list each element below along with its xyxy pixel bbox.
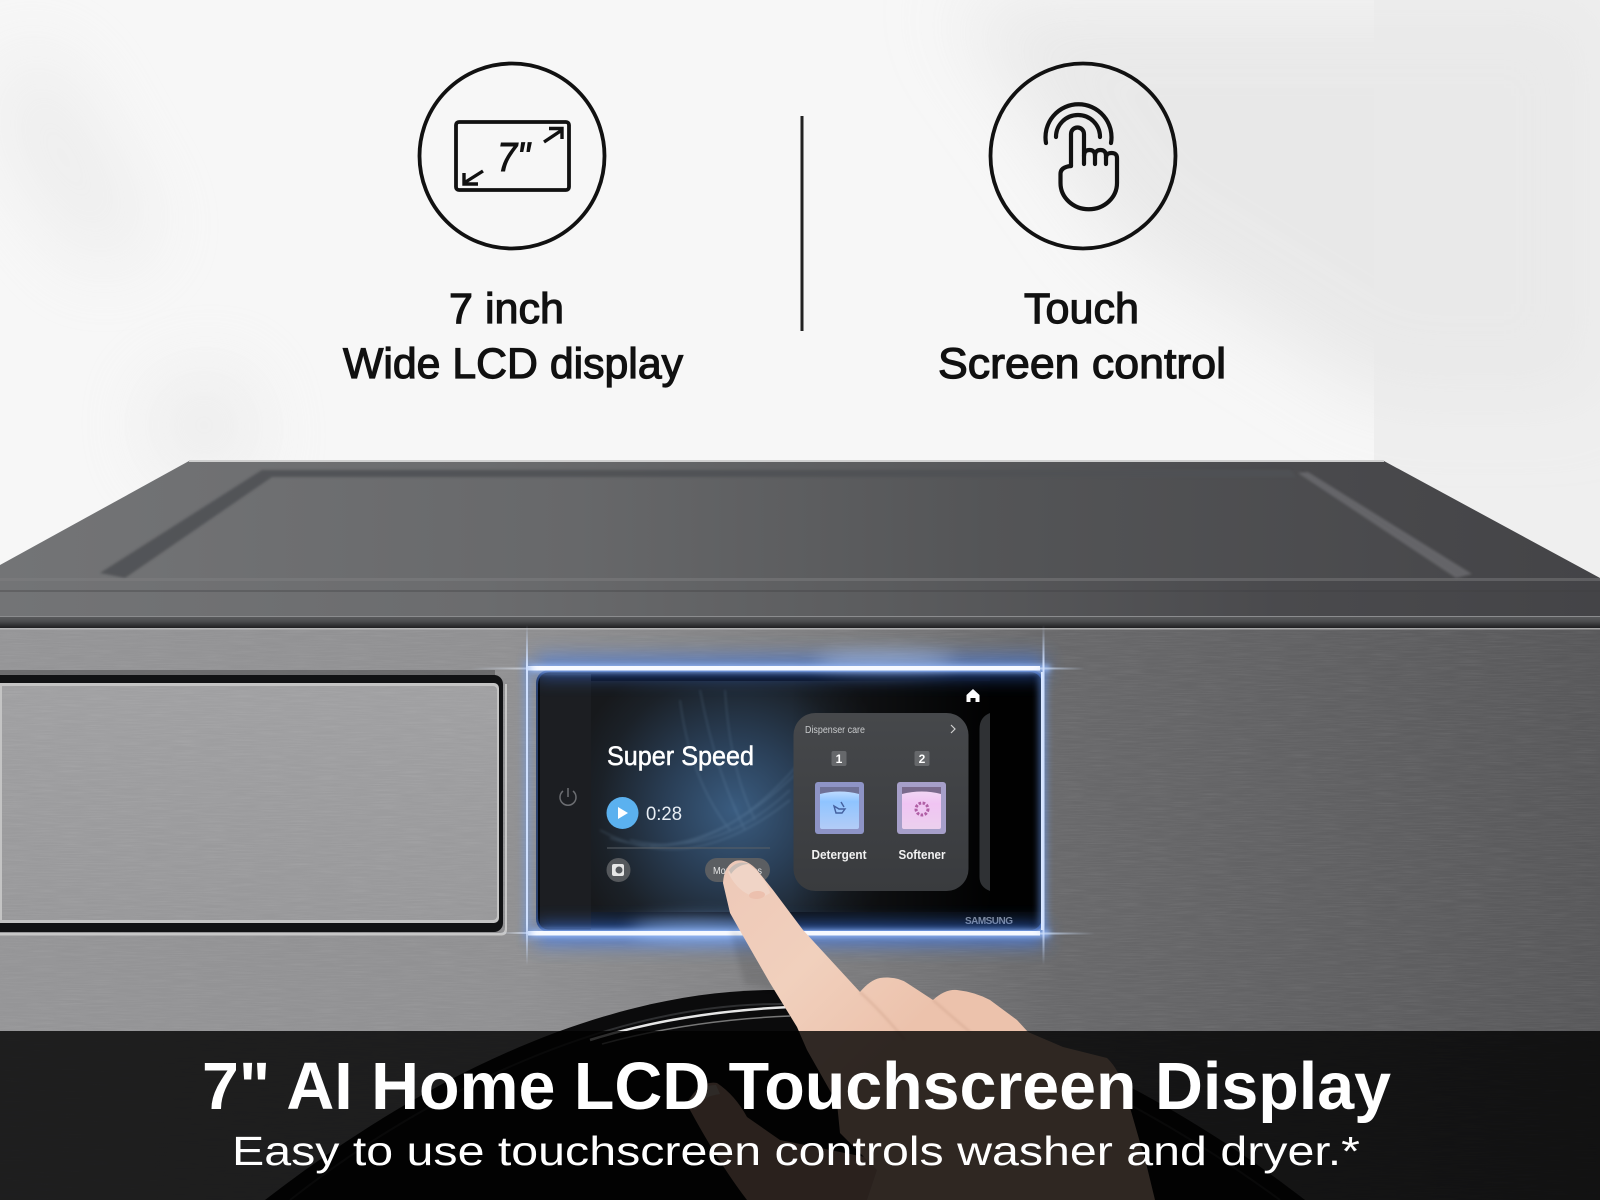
icon: 7 inch display xyxy=(420,64,604,248)
icon: 7 inch display: 7" xyxy=(497,134,532,180)
label: touch screen control: Touch xyxy=(1024,285,1139,333)
label: 7 inch wide LCD display: 7 inch xyxy=(449,285,564,333)
next card peek xyxy=(980,713,990,891)
touchscreen display xyxy=(536,670,1044,932)
drawer panel xyxy=(0,670,507,936)
headline: 7" AI Home LCD Touchscreen Display xyxy=(202,1049,1391,1124)
label: 7 inch wide LCD display xyxy=(343,285,683,388)
dispenser care card: Dispenser care xyxy=(805,725,865,736)
hand: lower finger xyxy=(687,1083,900,1200)
softener dispenser xyxy=(897,782,946,834)
divider in UI xyxy=(607,848,770,849)
icon: washer round button xyxy=(606,858,630,882)
detergent dispenser xyxy=(815,782,864,834)
icon: home xyxy=(966,689,980,702)
dispenser care card: Detergent xyxy=(812,847,867,862)
play timer xyxy=(606,797,682,829)
dispenser care card: Softener xyxy=(898,847,946,862)
play timer: 0:28 xyxy=(646,804,682,825)
SAMSUNG wordmark: SAMSUNG xyxy=(965,916,1013,927)
dispenser care card: 2 xyxy=(919,752,926,766)
program title: Super Speed: Super Speed xyxy=(607,741,754,771)
washer front steel panel xyxy=(0,628,1600,1200)
dispenser care card xyxy=(794,713,968,891)
more cycles button xyxy=(705,858,770,882)
label: touch screen control: Screen control xyxy=(938,340,1226,388)
label: 7 inch wide LCD display: Wide LCD display xyxy=(343,340,683,388)
blue glow lines around screen xyxy=(470,625,1095,965)
more cycles button: More cycles xyxy=(713,866,762,877)
hand: pointing finger xyxy=(723,860,1155,1200)
divider line xyxy=(800,116,804,331)
icon: touch screen hand xyxy=(990,64,1176,248)
washer top lid xyxy=(0,460,1600,628)
label: touch screen control xyxy=(938,285,1226,388)
bottom caption bar xyxy=(0,1031,1600,1200)
icon: power button xyxy=(560,788,576,805)
wall background xyxy=(0,0,1600,640)
washer door arc xyxy=(265,990,1305,1200)
dispenser care card: 1 xyxy=(836,752,843,766)
subheadline: Easy to use touchscreen controls washer and dryer.* xyxy=(232,1128,1360,1174)
screen wallpaper swirl xyxy=(600,690,810,849)
